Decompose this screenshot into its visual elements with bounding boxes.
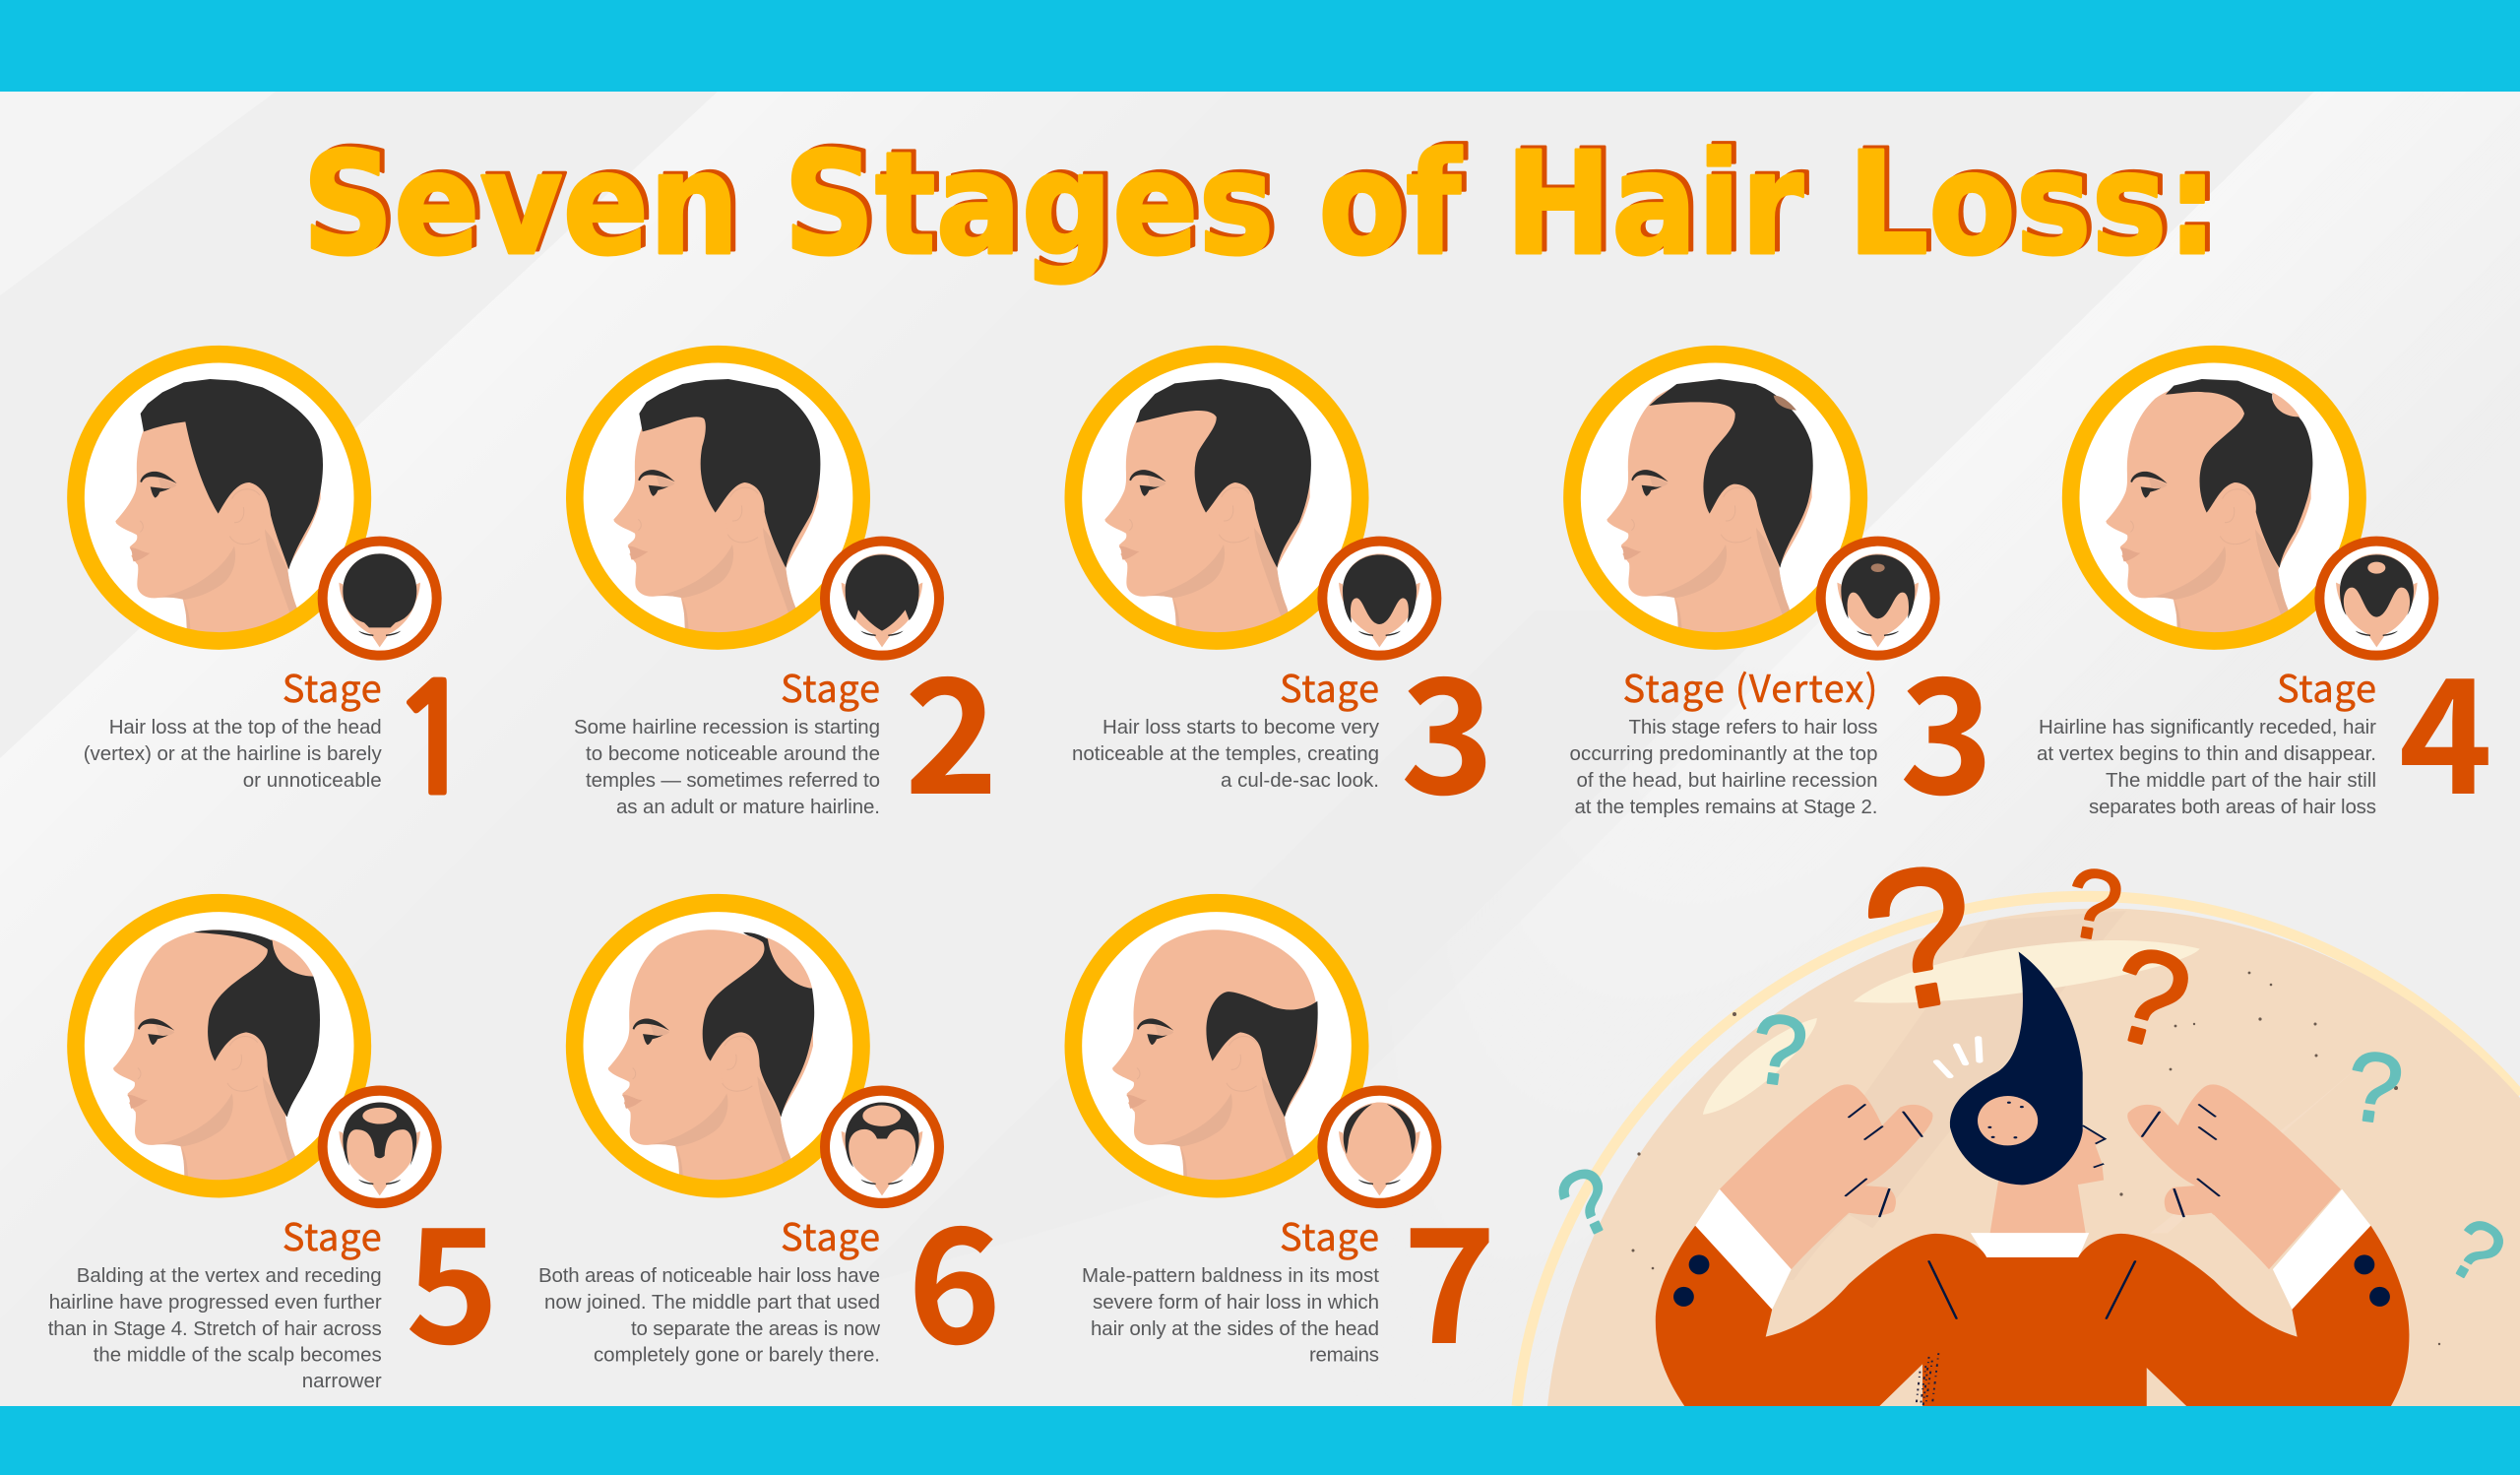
cream highlights xyxy=(1854,940,2200,1003)
stage 4 description: at vertex begins to thin and disappear. xyxy=(2037,742,2376,765)
cuffs xyxy=(1695,1189,2370,1310)
stage 1 description: Hair loss at the top of the head xyxy=(109,716,382,738)
stage 3 description xyxy=(1072,716,1380,792)
speckles xyxy=(1632,972,2440,1345)
panel: stage 3 vertex xyxy=(1569,354,1993,840)
stage 5 illustration xyxy=(76,903,437,1203)
stage 3 vertex illustration xyxy=(1572,354,1935,656)
inner arm light shapes xyxy=(1766,1215,2298,1357)
question marks: ? xyxy=(2057,846,2130,964)
panel: stage 5 xyxy=(48,903,499,1392)
stage 7 illustration xyxy=(1073,903,1436,1203)
stage 4 description: The middle part of the hair still xyxy=(2106,769,2376,792)
stage 5 description: than in Stage 4. Stretch of hair across xyxy=(48,1317,382,1340)
sweater xyxy=(1656,1226,2409,1408)
stage 5 description: narrower xyxy=(302,1370,382,1392)
title: Seven Stages of Hair Loss: xyxy=(302,121,2218,287)
stage 6 description: to separate the areas is now xyxy=(631,1317,880,1340)
panel: stage 1 xyxy=(76,354,480,817)
stage 3 vertex number: 3 xyxy=(1900,609,1993,840)
question marks xyxy=(1543,821,2519,1304)
question marks: ? xyxy=(2432,1199,2519,1304)
stage 5 description: hairline have progressed even further xyxy=(49,1291,382,1314)
stage 3 vertex heading: Stage (Vertex) xyxy=(1622,659,1878,713)
stage 1 description: (vertex) or at the hairline is barely xyxy=(84,742,382,765)
stage 5 description: Balding at the vertex and receding xyxy=(77,1264,382,1287)
stage 7 description: severe form of hair loss in which xyxy=(1093,1291,1379,1314)
question marks: ? xyxy=(1743,993,1813,1109)
neck xyxy=(1989,1175,2086,1235)
panel: stage 2 xyxy=(574,354,998,840)
stage 3 vertex description: at the temples remains at Stage 2. xyxy=(1575,796,1878,818)
question marks: ? xyxy=(1849,821,1993,1055)
stage 3 vertex description xyxy=(1569,716,1878,818)
stage 3 description: a cul-de-sac look. xyxy=(1221,769,1379,792)
panel: stage 3 xyxy=(1072,354,1494,840)
illustration: confused man xyxy=(1517,821,2520,1408)
stage 3 vertex description: of the head, but hairline recession xyxy=(1577,769,1878,792)
panel: stage 4 xyxy=(2037,354,2492,840)
stage 2 description: temples — sometimes referred to xyxy=(586,769,880,792)
stage 4 description: separates both areas of hair loss xyxy=(2089,796,2376,818)
stage 4 description xyxy=(2037,716,2376,818)
panel: stage 7 xyxy=(1073,903,1496,1389)
bald spot xyxy=(1978,1096,2038,1145)
stage 6 number: 6 xyxy=(908,1158,1001,1389)
stage 6 heading: Stage xyxy=(781,1207,880,1261)
stage 1 description xyxy=(84,716,382,792)
stage 3 number: 3 xyxy=(1401,609,1494,840)
stage 5 description: the middle of the scalp becomes xyxy=(94,1343,382,1367)
right arm and hand xyxy=(2127,1084,2341,1269)
stage 6 description: completely gone or barely there. xyxy=(594,1343,880,1367)
stage 2 number: 2 xyxy=(905,609,998,840)
stage 4 illustration xyxy=(2071,354,2433,656)
title: Seven Stages of Hair Loss: xyxy=(307,118,2223,284)
panel: stage 6 xyxy=(538,903,1001,1389)
collar xyxy=(1971,1233,2089,1258)
stage 1 description: or unnoticeable xyxy=(243,769,382,792)
stage 3 heading: Stage xyxy=(1280,659,1379,713)
stage 4 description: Hairline has significantly receded, hair xyxy=(2039,716,2376,738)
hair xyxy=(1950,952,2083,1185)
stage 2 description xyxy=(574,716,880,818)
left arm and hand xyxy=(1720,1084,1932,1269)
stage 1 illustration xyxy=(76,354,437,656)
stage 7 description: Male-pattern baldness in its most xyxy=(1082,1264,1379,1287)
top cyan bar xyxy=(0,0,2520,92)
sleeve buttons xyxy=(1673,1254,2390,1307)
finger lines xyxy=(1846,1105,2219,1217)
question marks: ? xyxy=(1543,1147,1631,1259)
stage 4 number: 4 xyxy=(2399,609,2492,840)
glasses and mouth xyxy=(2083,1125,2105,1168)
stage 2 description: Some hairline recession is starting xyxy=(574,716,880,738)
hair dots xyxy=(1987,1102,2024,1138)
stage 5 description xyxy=(48,1264,382,1392)
stage 6 illustration xyxy=(575,903,939,1203)
stage 7 number: 7 xyxy=(1403,1158,1496,1389)
stage 6 description: now joined. The middle part that used xyxy=(544,1291,880,1314)
question marks: ? xyxy=(2339,1030,2409,1146)
stage 6 description xyxy=(538,1264,880,1367)
white shock ticks xyxy=(1936,1038,1980,1076)
bottom cyan bar xyxy=(0,1406,2520,1475)
stage 1 heading: Stage xyxy=(283,659,382,713)
stage 5 heading: Stage xyxy=(283,1207,382,1261)
stage 4 heading: Stage xyxy=(2277,659,2376,713)
stage 2 description: to become noticeable around the xyxy=(586,742,880,765)
person xyxy=(1656,940,2409,1408)
dome background xyxy=(1517,896,2520,1406)
face xyxy=(2015,1123,2105,1185)
stage 3 illustration xyxy=(1073,354,1436,656)
stage 2 heading: Stage xyxy=(781,659,880,713)
stage 7 heading: Stage xyxy=(1280,1207,1379,1261)
stage 7 description xyxy=(1082,1264,1379,1367)
stage 7 description: hair only at the sides of the head xyxy=(1091,1317,1379,1340)
stage 3 vertex description: occurring predominantly at the top xyxy=(1569,742,1878,765)
stage 3 description: Hair loss starts to become very xyxy=(1102,716,1380,738)
stage 3 description: noticeable at the temples, creating xyxy=(1072,742,1379,765)
stage 1 number: 1 xyxy=(388,667,480,817)
question marks: ? xyxy=(2095,917,2204,1079)
stage 2 illustration xyxy=(575,354,939,656)
stage 3 vertex description: This stage refers to hair loss xyxy=(1628,716,1878,738)
stage 7 description: remains xyxy=(1309,1343,1379,1367)
stage 2 description: as an adult or mature hairline. xyxy=(616,796,880,818)
stage 5 number: 5 xyxy=(406,1158,499,1389)
stage 6 description: Both areas of noticeable hair loss have xyxy=(538,1264,880,1287)
stipple xyxy=(1917,1353,1938,1405)
sweater seam lines xyxy=(1929,1261,2135,1318)
